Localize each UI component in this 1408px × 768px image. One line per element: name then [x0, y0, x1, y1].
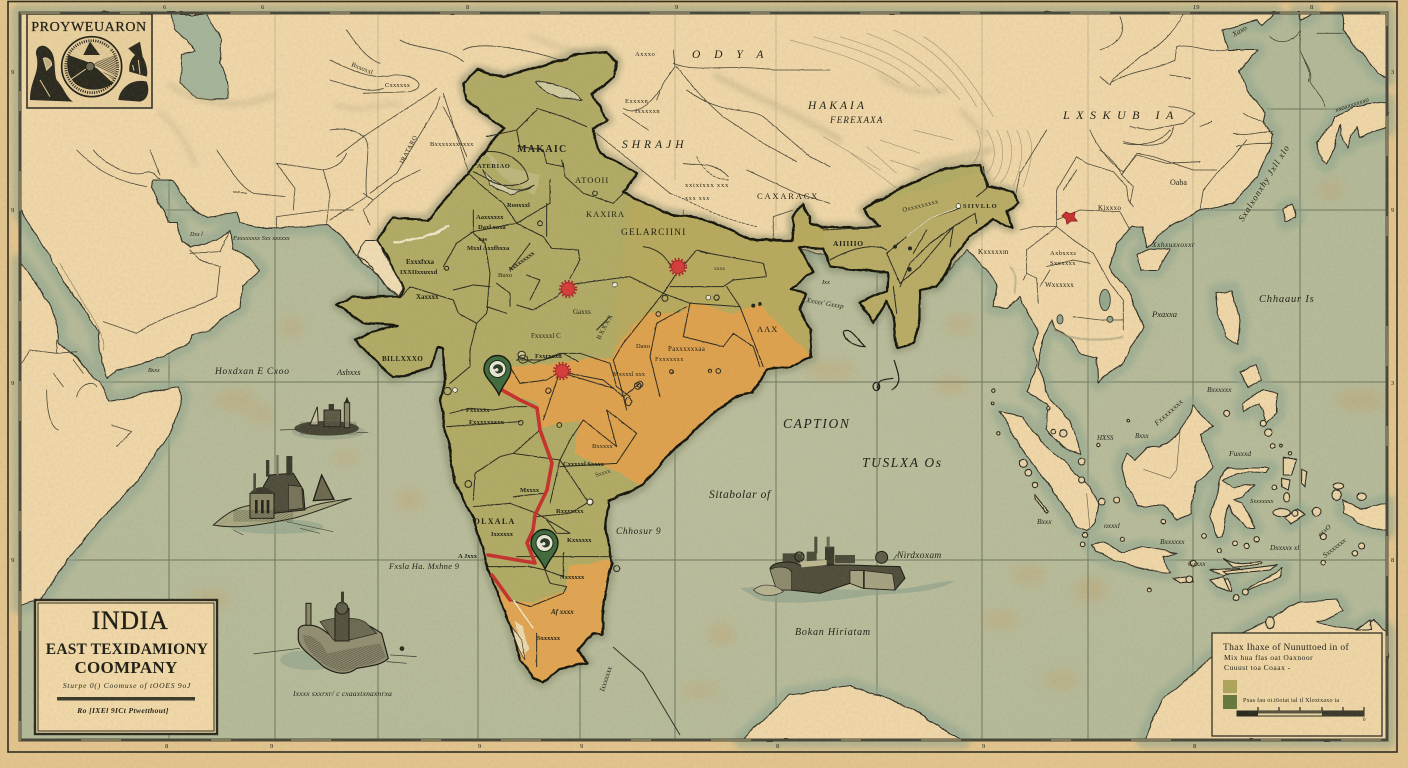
- text labels: sea names: Asbxxs: [336, 367, 361, 377]
- illustration: palace on island: [213, 455, 352, 535]
- text labels: Indian regions: Exxxfxxa: [406, 258, 434, 266]
- text labels: land names: [350, 49, 1187, 289]
- text labels: sea names: Sxxxxxxx: [1321, 535, 1348, 560]
- title cartouche: [35, 600, 217, 734]
- text labels: sea names: Fxxxxxxxx Sxx xxxxxx: [232, 235, 290, 242]
- text labels: Indian regions: Fxxrxaxn: [535, 353, 562, 360]
- river and border lines, central Asia and Himalaya: [330, 30, 830, 240]
- Borneo and Sumatra internal lines: [1087, 432, 1180, 530]
- text labels: Indian regions: Oxxxxxxxxx: [902, 198, 940, 214]
- frame coordinates: 3: [1391, 69, 1394, 76]
- frame coordinates: 9: [270, 743, 273, 750]
- text labels: sea names: CAPTION: [783, 416, 850, 431]
- text labels: Indian regions: DLXALA: [474, 517, 516, 526]
- text labels: land names: Cxxxxxx: [385, 82, 411, 89]
- India shadow: [337, 52, 1018, 682]
- frame coordinates: 9: [675, 4, 678, 11]
- swatch: olive territory: [1223, 680, 1237, 693]
- coastline line in southern sea: [613, 647, 680, 735]
- text labels: land names: CAXARACX: [757, 191, 819, 201]
- frame coordinates: 9: [580, 743, 583, 750]
- text labels: land names: Ixxxxxn: [635, 108, 660, 115]
- inset heading: PROYWEUARON: [31, 20, 147, 35]
- internal borders, southern India: [444, 353, 641, 667]
- text labels: sea names: Bxxx: [1135, 432, 1149, 440]
- text labels: Indian regions: Sxxxx: [595, 468, 611, 479]
- conflict marker: Patna: [670, 259, 686, 275]
- text labels: Indian regions: BILLXXXO: [382, 355, 423, 363]
- text labels: Indian regions: ATERIAO: [477, 163, 510, 170]
- subtitle second line: COOMPANY: [74, 658, 178, 677]
- frame coordinates: 9: [11, 380, 14, 387]
- text labels: sea names: Hoxdxan E Cxoo: [214, 367, 290, 377]
- map pin: south: [531, 530, 558, 569]
- text labels: sea names: Bxxx: [148, 368, 160, 374]
- text labels: Indian regions: Rxxxxxxx: [556, 508, 584, 515]
- river lines, Indochina and China: [1010, 130, 1200, 340]
- text labels: Indian regions: A Jxxx: [458, 553, 478, 560]
- text labels: sea names: HXSS: [1096, 434, 1114, 442]
- text labels: sea names: Bxxx: [1037, 517, 1052, 526]
- text labels: sea names: Bokan Hiriatam: [795, 627, 871, 638]
- frame coordinates: 8: [466, 4, 469, 11]
- text labels: land names: Axxxo: [635, 51, 655, 58]
- illustration: Madras fort: [740, 537, 955, 603]
- text labels: land names: xxtxtxxx xxx: [685, 182, 729, 189]
- mountain shading: [160, 35, 990, 170]
- text labels: land names: Exxxxn: [625, 98, 648, 105]
- text labels: Indian regions: Xaxxxx: [416, 293, 439, 301]
- text labels: sea names: TUSLXA Os: [862, 455, 943, 470]
- small islands of the archipelago: [991, 389, 1372, 630]
- swatch: green territory: [1223, 695, 1237, 709]
- cartouche credit: Ro [IXEl 9ICt Ptwetthout]: [76, 706, 169, 715]
- pale Indus and Rann fringe: [358, 82, 582, 297]
- text labels: land names: IRATARO: [399, 134, 419, 165]
- text labels: Indian regions: AAX: [757, 324, 778, 334]
- text labels: Indian regions: Gaxxs: [573, 308, 591, 316]
- text labels: Indian regions: Kxxxxxx: [567, 537, 592, 544]
- frame coordinates: 8: [1391, 557, 1394, 564]
- text labels: sea names: oxxxl: [1104, 521, 1120, 530]
- Indochina lakes: [1057, 289, 1113, 324]
- Malabar pale strip: [515, 620, 530, 655]
- orange region, far south: [498, 559, 611, 681]
- conflict marker: Bhopal: [560, 281, 576, 297]
- text labels: Indian regions: Daxl xaxa: [478, 224, 506, 231]
- frame coordinates: 9: [1391, 207, 1394, 214]
- text labels: sea names: Gxxxx: [1188, 560, 1206, 568]
- text labels: sea names: Chhaaur Is: [1259, 294, 1315, 305]
- text labels: land names: Kixxxo: [1098, 204, 1122, 212]
- text labels: Indian regions: KAXIRA: [586, 209, 625, 219]
- trade route: [488, 390, 552, 600]
- frame coordinates: 6: [261, 4, 265, 11]
- text labels: Indian regions: Paxxxxxxaa: [668, 345, 706, 353]
- text labels: land names: SHRAJH: [622, 139, 688, 151]
- text labels: sea names: Fxxxxxxxx: [1152, 397, 1185, 428]
- text labels: sea names: Ixxxx sxxrxr/ c cxaaxtxnaxnrxa: [292, 689, 392, 698]
- frame coordinates: 8: [1193, 743, 1196, 750]
- text labels: Indian regions: xxxx: [714, 266, 725, 272]
- north-east tint: [834, 228, 837, 266]
- text labels: sea names: xxoxxxxxxxo: [1333, 95, 1370, 114]
- text labels: sea names: Bxxxxxx: [1160, 537, 1185, 546]
- text labels: Indian regions: Nxxxxxx: [560, 574, 585, 581]
- illustration: harbour island with tower: [280, 397, 368, 440]
- contour hachures, Tibet and China: [790, 30, 1032, 193]
- frame coordinates: 19: [1193, 4, 1200, 11]
- text labels: Indian regions: Cxxxxxl Sxxxx: [563, 461, 605, 468]
- cartouche caption: Sturpe 0() Coomuse of tOOES 9oJ: [63, 681, 191, 690]
- text labels: Indian regions: BXXXX: [596, 313, 615, 341]
- text labels: Indian regions: Mxxxx: [520, 487, 540, 494]
- text labels: land names: Bxxoxxl: [350, 61, 374, 76]
- text labels: land names: Bxxxxxxxxxxx: [430, 141, 474, 148]
- text labels: Indian regions: Daxo: [636, 343, 650, 350]
- scale bar: 0: [1363, 718, 1366, 723]
- text labels: land names: O D Y A: [692, 49, 769, 61]
- text labels: Indian regions: xas: [478, 236, 488, 243]
- legend box: Mix hua flas oat Oaxnoor: [1224, 653, 1313, 662]
- internal borders, north-east: [823, 167, 987, 313]
- frame coordinates: 8: [165, 743, 168, 750]
- text labels: Indian regions: Fxxxxxxx: [655, 356, 684, 363]
- frame coordinates: 8: [1310, 4, 1313, 11]
- engraving: medallion and figures: [30, 37, 148, 102]
- text labels: sea names: Dxxxxx xl: [1269, 543, 1299, 552]
- text labels: sea names: Xxhxuxxoxxr: [1151, 240, 1195, 249]
- text labels: Indian regions: Sxxxxxx: [537, 635, 561, 642]
- frame coordinates: 8: [776, 743, 779, 750]
- illustration: sea fort southwest: [253, 592, 417, 673]
- river and border lines, western lands: [22, 150, 420, 447]
- frame coordinates: 3: [1391, 380, 1394, 387]
- text labels: sea names: Ixxxxxxx: [597, 665, 614, 694]
- text labels: land names: Wxxxxxx: [1045, 281, 1074, 289]
- text labels: sea names: Xaxo: [1230, 23, 1249, 39]
- text labels: Indian regions: Aaxxxxxx: [476, 214, 504, 221]
- frame coordinates: 9: [982, 743, 985, 750]
- faint graticule over land: [275, 13, 1300, 370]
- text labels: sea names: Ixx: [821, 279, 830, 286]
- conflict marker: Deccan: [554, 363, 570, 379]
- text labels: sea names: Xxxxx' Gxxxp: [805, 296, 845, 311]
- text labels: sea names: Sitabolar of: [709, 489, 772, 501]
- text labels: Indian regions: [382, 144, 998, 642]
- orange region, Deccan east: [497, 303, 815, 490]
- text labels: Indian regions: ATOOII: [575, 175, 609, 185]
- engraved inset: [27, 14, 152, 108]
- text labels: land names: Oaba: [1170, 178, 1187, 187]
- scale caption: Pxas fau oi.t6otat tal tl Xloxtxaxo ta: [1243, 697, 1339, 704]
- text labels: Indian regions: AIIIIIO: [833, 239, 864, 248]
- text labels: land names: xxx xxx: [685, 196, 710, 202]
- text labels: land names: HAKAIA: [807, 100, 867, 112]
- cartouche rule: [57, 697, 195, 700]
- text labels: Indian regions: Af xxxx: [550, 608, 574, 616]
- text labels: sea names: Pxaxxa: [1151, 309, 1177, 319]
- frame coordinates: 9: [478, 743, 481, 750]
- text labels: Indian regions: Ixxxxxx: [491, 531, 514, 538]
- text labels: sea names: [148, 23, 1370, 698]
- conflict marker: Burma: [1062, 212, 1077, 224]
- text labels: Indian regions: MAKAIC: [517, 144, 568, 155]
- legend box: [1212, 633, 1382, 736]
- text labels: Indian regions: Fxxxxxxxxx: [469, 419, 505, 426]
- subtitle: East India Company: EAST TEXIDAMIONY: [46, 641, 208, 658]
- text labels: Indian regions: SIIVLLO: [963, 203, 998, 210]
- internal borders, northern India: [402, 108, 767, 410]
- frame coordinates: 6: [163, 4, 167, 11]
- legend box: Cuuust toa Coaax -: [1224, 663, 1291, 672]
- text labels: Indian regions: Fxxxxxl C: [531, 332, 561, 340]
- text labels: sea names: Fxsla Ha. Mxhne 9: [388, 561, 460, 571]
- text labels: Indian regions: Mxxxxl xxx: [613, 371, 646, 378]
- frame coordinates: 9: [11, 69, 14, 76]
- text labels: Indian regions: GELARCIINI: [621, 228, 686, 238]
- frame coordinates: 9: [11, 207, 14, 214]
- text labels: land names: FEREXAXA: [829, 115, 884, 125]
- Caspian Sea: [172, 15, 228, 100]
- text labels: land names: Sxxxxxx: [1050, 260, 1076, 267]
- text labels: land names: Axbxxxs: [1050, 250, 1076, 257]
- river lines, north China coast: [1100, 13, 1343, 210]
- text labels: sea names: Fuxxxd: [1228, 449, 1251, 458]
- text labels: sea names: Chhosur 9: [616, 527, 661, 537]
- text labels: Indian regions: IXXIIxxuxxd: [400, 269, 438, 276]
- text labels: Indian regions: Axxxxxxxx: [507, 249, 537, 274]
- text labels: land names: Kxxxxxm: [978, 248, 1009, 256]
- scale bar: [1237, 707, 1366, 723]
- text labels: Indian regions: Rooxxxl: [507, 202, 530, 209]
- Bay of Bengal islands: [843, 330, 899, 391]
- text labels: sea names: Sxalxonxhy Jxll xlo: [1236, 143, 1292, 223]
- text labels: sea names: oxxO: [1316, 523, 1333, 539]
- India territory: [337, 52, 1020, 690]
- text labels: Indian regions: Bxxxxx: [592, 443, 613, 450]
- text labels: Indian regions: Buxo: [498, 272, 512, 279]
- title: India: INDIA: [92, 606, 168, 635]
- text labels: Indian regions: Pxxxxxx: [466, 407, 490, 414]
- map pin: north: [484, 356, 511, 395]
- text labels: sea names: Bxxxxxx: [1207, 385, 1232, 394]
- text labels: land names: LXSKUB IA: [1062, 108, 1180, 122]
- legend text: Thax Ihaxe of Nunuttoed in of: [1223, 642, 1349, 653]
- pale Thar region: [486, 152, 540, 196]
- text labels: Indian regions: Mxxl Axxfbxxa: [467, 245, 510, 252]
- text labels: sea names: Nirdxoxam: [896, 551, 942, 561]
- sea stains: [190, 182, 1386, 696]
- text labels: sea names: Sxxxxxxx: [1250, 498, 1274, 505]
- frame coordinates: 9: [11, 557, 14, 564]
- text labels: sea names: Dxx l: [189, 232, 203, 238]
- Bengal tint: [806, 262, 807, 263]
